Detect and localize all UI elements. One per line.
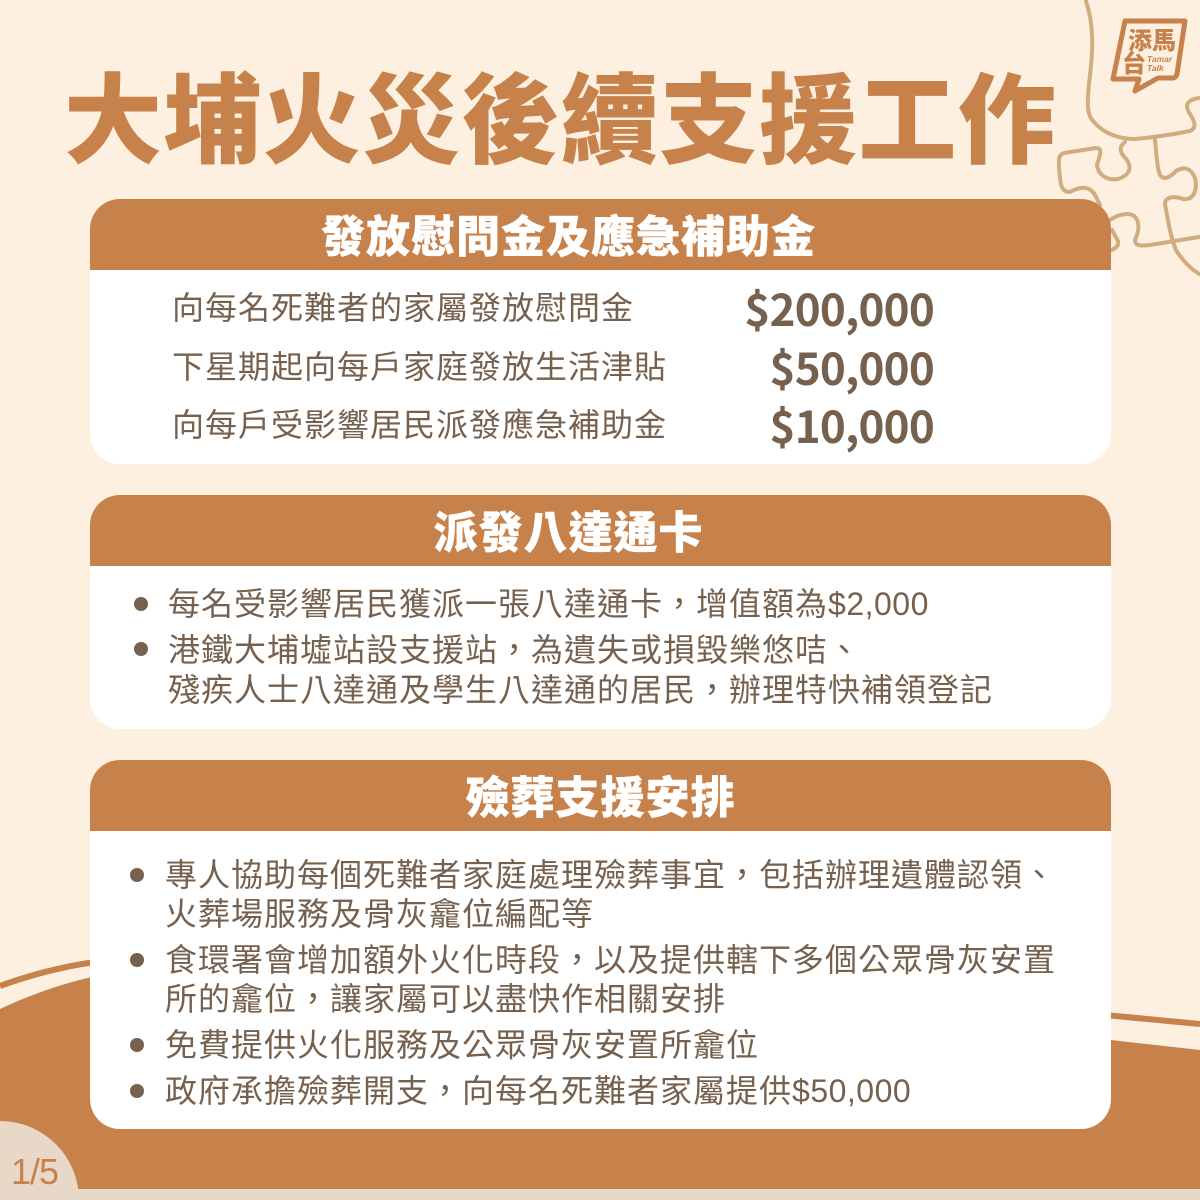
- bullet text 2: 殘疾人士八達通及學生八達通的居民，辦理特快補領登記: [168, 672, 993, 708]
- row 3 text: 向每戶受影響居民派發應急補助金: [172, 407, 667, 443]
- bullet: [134, 597, 148, 611]
- logo: Tamar Talk speech bubble: 添馬: [1128, 21, 1176, 56]
- brown hill body: [90, 1030, 1200, 1189]
- bullet: [130, 1084, 144, 1098]
- bullet: [130, 1038, 144, 1052]
- logo: Tamar Talk speech bubble: Talk: [1147, 63, 1165, 73]
- bullet text 2: 所的龕位，讓家屬可以盡快作相關安排: [165, 981, 726, 1017]
- brown hill left: [0, 975, 100, 1189]
- logo: Tamar Talk speech bubble: Tamar: [1147, 54, 1173, 64]
- page number: 1/5: [11, 1151, 58, 1192]
- bullet text 2: [168, 632, 993, 708]
- row 1 text: 向每名死難者的家屬發放慰問金: [172, 290, 634, 326]
- row 2 amount: $50,000: [770, 334, 934, 398]
- page badge: [0, 1121, 79, 1200]
- bullet text 1: 每名受影響居民獲派一張八達通卡，增值額為$2,000: [168, 586, 929, 622]
- logo: Tamar Talk speech bubble: 台: [1122, 44, 1146, 79]
- bullet text 1: 專人協助每個死難者家庭處理殮葬事宜，包括辦理遺體認領、: [165, 857, 1056, 893]
- row 3 amount: $10,000: [770, 392, 934, 456]
- bullet text 1: 火葬場服務及骨灰龕位編配等: [165, 896, 594, 932]
- logo: Tamar Talk speech bubble: [1113, 21, 1185, 91]
- bullet text 2: [165, 942, 1056, 1017]
- panel heading: 殮葬支援安排: [466, 762, 736, 826]
- bullet text 4: 政府承擔殮葬開支，向每名死難者家屬提供$50,000: [165, 1073, 911, 1109]
- panel: funeral support: [90, 760, 1111, 1129]
- line right: [1105, 1015, 1200, 1024]
- bullet text 1: [165, 857, 1056, 932]
- puzzle outlines: [1059, 1, 1199, 274]
- bullet text 2: 食環署會增加額外火化時段，以及提供轄下多個公眾骨灰安置: [165, 942, 1056, 978]
- row 2 text: 下星期起向每戶家庭發放生活津貼: [172, 349, 667, 385]
- panel heading: [90, 199, 1111, 270]
- panel heading: 發放慰問金及應急補助金: [321, 201, 816, 265]
- bullet text 3: 免費提供火化服務及公眾骨灰安置所龕位: [165, 1027, 759, 1063]
- bullet: [134, 642, 148, 656]
- title: 大埔火災後續支援工作: [64, 42, 1057, 184]
- panel: condolence payments: [90, 199, 1111, 464]
- bullet text 2: 港鐵大埔墟站設支援站，為遺失或損毀樂悠咭、: [168, 632, 861, 668]
- panel heading: 派發八達通卡: [434, 497, 704, 561]
- bullet: [130, 868, 144, 882]
- bottom strip: [0, 1189, 1200, 1200]
- row 1 amount: $200,000: [744, 275, 934, 339]
- bullet: [130, 953, 144, 967]
- panel heading: [90, 495, 1111, 566]
- curved line left: [0, 962, 95, 986]
- panel heading: [90, 760, 1111, 831]
- panel: octopus cards: [90, 495, 1111, 729]
